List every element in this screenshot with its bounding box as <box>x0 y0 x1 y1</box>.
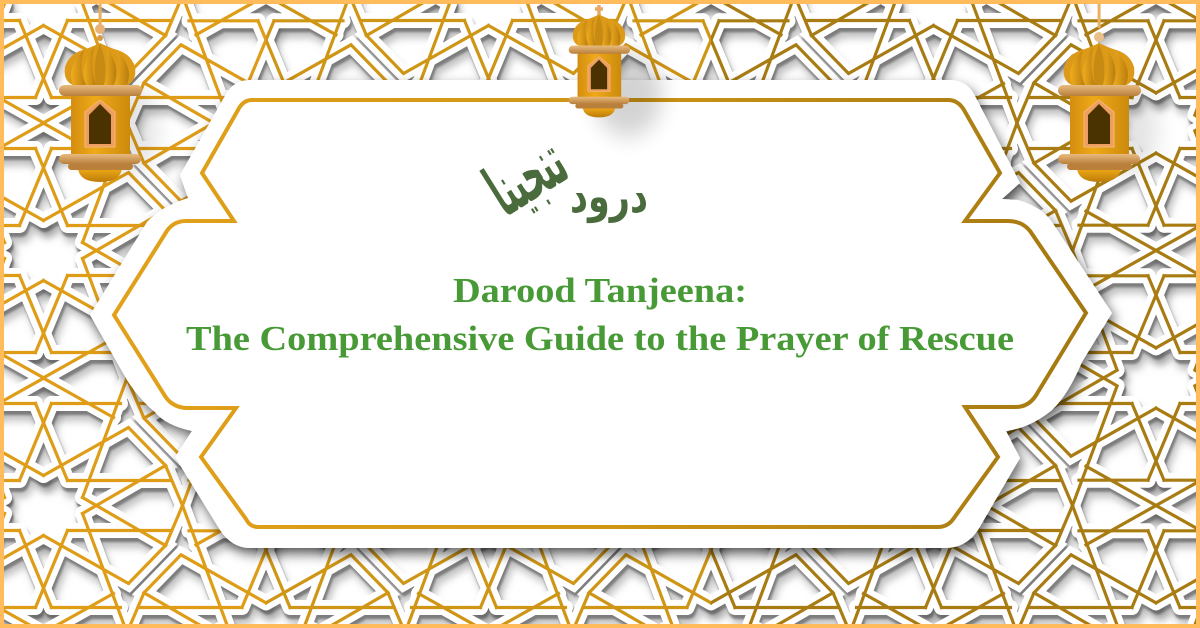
banner: white plaque with gold outline <box>90 80 1112 548</box>
lantern: top right <box>1058 4 1158 182</box>
urdu calligraphy heading <box>471 121 648 232</box>
urdu calligraphy heading: تنجینا <box>471 121 581 232</box>
lantern: top left <box>59 4 158 182</box>
urdu calligraphy heading: درود <box>570 169 648 223</box>
title: line one: Darood Tanjeena: <box>453 271 747 310</box>
title: line two: The Comprehensive Guide to the Prayer of Rescue <box>186 319 1014 358</box>
lantern: top centre <box>569 5 662 137</box>
